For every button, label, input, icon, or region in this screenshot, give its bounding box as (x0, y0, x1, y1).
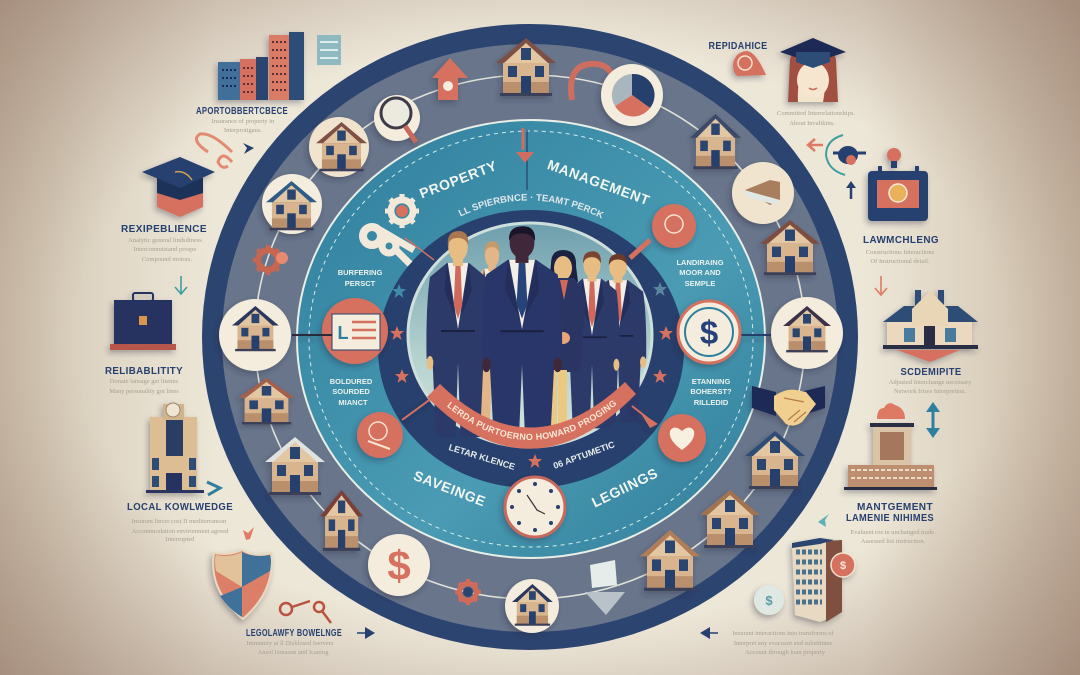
heading: property: PROPERTY (417, 157, 499, 201)
title: RELIBABLITITY (105, 366, 183, 377)
description (128, 237, 202, 263)
ring icon: house top right (690, 114, 741, 169)
description: Assessed list instruction. (861, 538, 926, 545)
text: landiraing: MOOR AND (679, 268, 721, 277)
ring icon: dollar circle (368, 534, 430, 596)
ring icon: right circle house (771, 297, 843, 369)
icon: calendar with bulb (868, 148, 928, 221)
text: boldured (330, 377, 373, 407)
description: bottom right: Interpret any evacuant and substitutes (734, 640, 833, 647)
icon: teal screen (317, 35, 341, 65)
ring icon: house right 2 (760, 220, 820, 275)
woman (545, 250, 586, 426)
connector ring (255, 75, 805, 599)
title: LAMENIE NIHIMES (846, 513, 934, 524)
ring icon: house bottom 1 (640, 530, 700, 591)
description (777, 110, 855, 127)
text: boldured: SOURDED (332, 387, 370, 396)
icon: globe badge: $ (765, 593, 773, 608)
icon: cloud (877, 403, 905, 419)
text: etanning (690, 377, 732, 407)
arrow (207, 482, 220, 495)
description: Donate lansage get litenns (110, 378, 179, 385)
ring icon: left circle house (219, 299, 291, 371)
description: Committed Interrelationships. (777, 110, 855, 117)
description (132, 518, 229, 543)
ring icon: house bottom 2 (700, 490, 760, 548)
arrow (357, 627, 375, 639)
description: bottom right: Account through loan property (745, 649, 826, 656)
arrow: teal double (926, 402, 940, 438)
arrow: red down (875, 276, 887, 295)
dashed ring (309, 131, 753, 547)
icon: globe badge (754, 585, 784, 615)
arrow (243, 143, 254, 154)
grey ring (222, 44, 838, 632)
ring icon: house left 1 (238, 378, 295, 424)
icon: clock tower building (146, 403, 204, 493)
description: Many personality got lines (109, 388, 179, 395)
heading: legiings: LEGIINGS (589, 465, 661, 510)
text: landiraing: LANDIRAING (676, 258, 724, 267)
icon: apartment towers (218, 32, 304, 100)
title: REXIPEBLIENCE (121, 224, 207, 235)
arrow: navy left (700, 627, 718, 639)
title (846, 502, 934, 524)
description: Immunity at ll Disklosed Iservers (246, 640, 334, 647)
description: Evaluent ros in unchanged trade. (850, 529, 936, 536)
text: landiraing (676, 258, 724, 288)
text: burfering perset (338, 268, 382, 288)
ring icon: house left 3 (320, 490, 363, 551)
description: About Invaltkins. (789, 120, 835, 127)
man left (426, 231, 490, 437)
description: Interprotigans. (224, 127, 262, 134)
ring icon: house top left 2 (262, 174, 322, 234)
ring icon: red gear (253, 245, 288, 275)
icon: apartment complex (844, 423, 937, 490)
icon: license card (292, 298, 388, 364)
description: Interconnutstand prospe (134, 246, 196, 253)
ring icon: dollar circle: $ (387, 542, 411, 589)
icon: red badge left bottom (357, 398, 432, 458)
group: repidahice (708, 38, 855, 127)
icon: mansion (883, 290, 978, 362)
description (866, 249, 935, 265)
teal ring (297, 120, 765, 558)
description: Insurant lincer cost II mediterranean (132, 518, 227, 525)
description: bottom right (732, 630, 835, 656)
group: legislative knowledge (213, 550, 342, 656)
man centre (482, 226, 562, 442)
icon: dollar coin (678, 301, 790, 363)
arrow (175, 276, 187, 294)
heading: management: MANAGEMENT (545, 156, 652, 208)
text: landiraing: SEMPLE (685, 279, 715, 288)
text: burfering perset: BURFERING (338, 268, 382, 277)
icon: teal cycle and key (826, 135, 866, 175)
team of people (426, 226, 646, 442)
ring icon: magnifier (374, 95, 420, 142)
description (212, 118, 275, 134)
person behind (469, 241, 515, 418)
decoration: red squiggle (196, 134, 232, 167)
arrow: top down (516, 128, 534, 190)
group: apartment experience (196, 32, 304, 134)
description (889, 379, 972, 395)
group: reliability (105, 293, 183, 395)
text: boldured: BOLDURED (330, 377, 373, 386)
curved text: team pierce: LL SPIERBNCE · TEAMT PERCK (458, 194, 604, 218)
description: Adjusted Interchange necessary (889, 379, 972, 386)
arrow: red notch (243, 527, 254, 540)
text: apthmetic: 06 APTUMETIC (552, 439, 617, 471)
group: experience (121, 157, 215, 263)
banner: LERDA PURTOERNO HOWARD PROGING (447, 400, 616, 440)
description (850, 529, 936, 545)
arrow: teal small (818, 514, 829, 527)
icon: graduation cap (142, 157, 215, 217)
text: etanning: RILLEDID (694, 398, 729, 407)
description: Of Instructional detail. (870, 258, 930, 265)
description: Analytic general lindsdiness (128, 237, 202, 244)
description: Accommodation environment agreed (132, 528, 229, 535)
icon: briefcase (110, 293, 176, 350)
title: APORTOBBERTCBECE (196, 106, 288, 117)
description: bottom right: Insurant interactions into transforms of (732, 630, 835, 637)
panel: central concentric circle diagram (202, 24, 858, 650)
description: Compound motors. (142, 256, 192, 263)
icon: clock (505, 477, 565, 537)
ring icon: house right 1 (745, 431, 805, 489)
group: management (844, 403, 937, 545)
description (109, 378, 179, 395)
banner (427, 382, 636, 449)
stars (390, 282, 673, 468)
icon: inner keys (363, 227, 434, 264)
icon: dollar coin: $ (700, 314, 718, 351)
group: scdemipite (883, 290, 978, 395)
man right (564, 251, 620, 428)
group: law machine (863, 148, 939, 265)
ring icon: top house (496, 38, 556, 96)
title: REPIDAHICE (708, 41, 768, 52)
icon: red badge (733, 51, 766, 76)
description: Constructions Interactions (866, 249, 935, 256)
navy inner ring (378, 210, 684, 488)
text: burfering perset: PERSCT (345, 279, 376, 288)
icon: shield (213, 550, 272, 619)
group: local knowledge (127, 403, 233, 543)
icon: tall building with badge (792, 538, 855, 622)
text: etanning: BOHERST? (690, 387, 732, 396)
ring icon: handshake (752, 386, 825, 426)
description: Network Irises Interpretion. (894, 388, 967, 395)
title: MANTGEMENT (857, 502, 933, 513)
heading: saveinge: SAVEINGE (411, 467, 488, 509)
ring icon: pie badge (601, 64, 663, 126)
ring icon: red arrow house (432, 58, 468, 100)
ring icon: keyboard circle (732, 162, 794, 224)
outer navy ring (202, 24, 858, 650)
team backdrop circle (408, 223, 652, 447)
description: Interrupted (166, 536, 195, 543)
description: Ansol Isreason and Icaning (258, 649, 329, 656)
arrow: red left (808, 139, 823, 151)
ring icon: small gear (455, 579, 481, 605)
text: etanning: ETANNING (692, 377, 730, 386)
title: LAWMCHLENG (863, 235, 939, 246)
description (246, 640, 334, 656)
text: letar klence: LETAR KLENCE (447, 442, 516, 472)
icon: inner gear (385, 194, 419, 228)
ring icon: horseshoe (571, 64, 613, 100)
title: LOCAL KOWLWEDGE (127, 502, 233, 513)
ring icon: bottom circle building (505, 579, 559, 633)
icon: tall building with badge: $ (840, 560, 846, 572)
icon: top right red badge (630, 204, 696, 258)
icon: keys (280, 601, 331, 623)
text: boldured: MIANCT (338, 398, 368, 407)
man far right (590, 254, 646, 423)
ring icon: paper and down arrow (585, 560, 625, 615)
arrow: navy up (846, 181, 856, 199)
icon: heart badge (632, 406, 706, 462)
icon: graduate woman (780, 38, 846, 102)
ring icon: house left 2 (265, 437, 325, 495)
title: SCDEMIPITE (900, 367, 962, 378)
description: Insurance of property in (212, 118, 275, 125)
title: LEGOLAWFY BOWELNGE (246, 628, 342, 639)
ring icon: house top left 1 (309, 117, 369, 177)
icon: license card: L (338, 323, 348, 343)
